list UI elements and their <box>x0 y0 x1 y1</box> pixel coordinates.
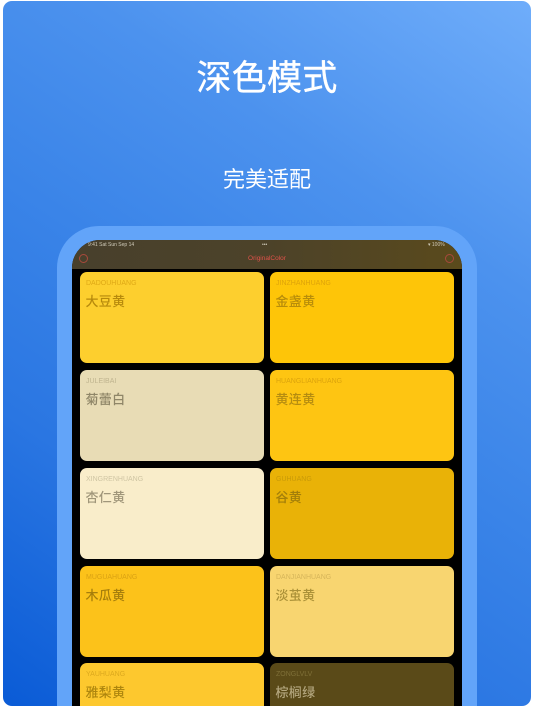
status bar dots: ••• <box>262 242 267 248</box>
status bar time: 9:41 Sat Sun Sep 14 <box>88 242 134 248</box>
card: 雅梨黄 <box>80 663 264 706</box>
card: 棕榈绿 <box>270 663 454 706</box>
navigation bar <box>72 240 462 269</box>
status bar battery: ▾ 100% <box>428 242 445 248</box>
card: 金盏黄 <box>270 272 454 363</box>
card: 菊蕾白 <box>80 370 264 461</box>
card: 雅梨黄: 雅梨黄 <box>86 684 125 700</box>
card: 黄连黄: 黄连黄 <box>276 392 315 406</box>
card: 淡茧黄: DANJIANHUANG <box>276 574 331 580</box>
card: 金盏黄: JINZHANHUANG <box>276 280 331 286</box>
card: 大豆黄 <box>80 272 264 363</box>
card: 金盏黄: 金盏黄 <box>276 294 315 308</box>
card: 木瓜黄: 木瓜黄 <box>86 588 125 602</box>
tablet frame <box>57 226 477 706</box>
card: 淡茧黄 <box>270 566 454 657</box>
app name: OriginalColor <box>248 255 286 262</box>
card: 雅梨黄: YAUHUANG <box>86 670 125 678</box>
subtitle: 完美适配 <box>223 167 311 192</box>
icon: right nav button <box>445 254 454 263</box>
card: 杏仁黄: XINGRENHUANG <box>86 476 143 482</box>
card: 谷黄: 谷黄 <box>276 490 302 504</box>
icon: left nav button <box>79 254 88 263</box>
card: 淡茧黄: 淡茧黄 <box>276 588 315 602</box>
card: 黄连黄: HUANGLIANHUANG <box>276 378 342 384</box>
card: 棕榈绿: 棕榈绿 <box>276 684 315 700</box>
card: 菊蕾白: 菊蕾白 <box>86 392 125 406</box>
card: 大豆黄: 大豆黄 <box>86 294 125 308</box>
card: 大豆黄: DADOUHUANG <box>86 280 137 286</box>
card: 杏仁黄: 杏仁黄 <box>86 490 125 504</box>
card: 谷黄: GUHUANG <box>276 476 312 482</box>
card: 谷黄 <box>270 468 454 559</box>
card: 黄连黄 <box>270 370 454 461</box>
title: 深色模式 <box>196 59 338 98</box>
card: 木瓜黄 <box>80 566 264 657</box>
card: 棕榈绿: ZONGLVLV <box>276 670 312 678</box>
card: 木瓜黄: MUGUAHUANG <box>86 574 137 580</box>
card: 杏仁黄 <box>80 468 264 559</box>
tablet screen <box>72 240 462 706</box>
card: 菊蕾白: JULEIBAI <box>86 378 116 384</box>
